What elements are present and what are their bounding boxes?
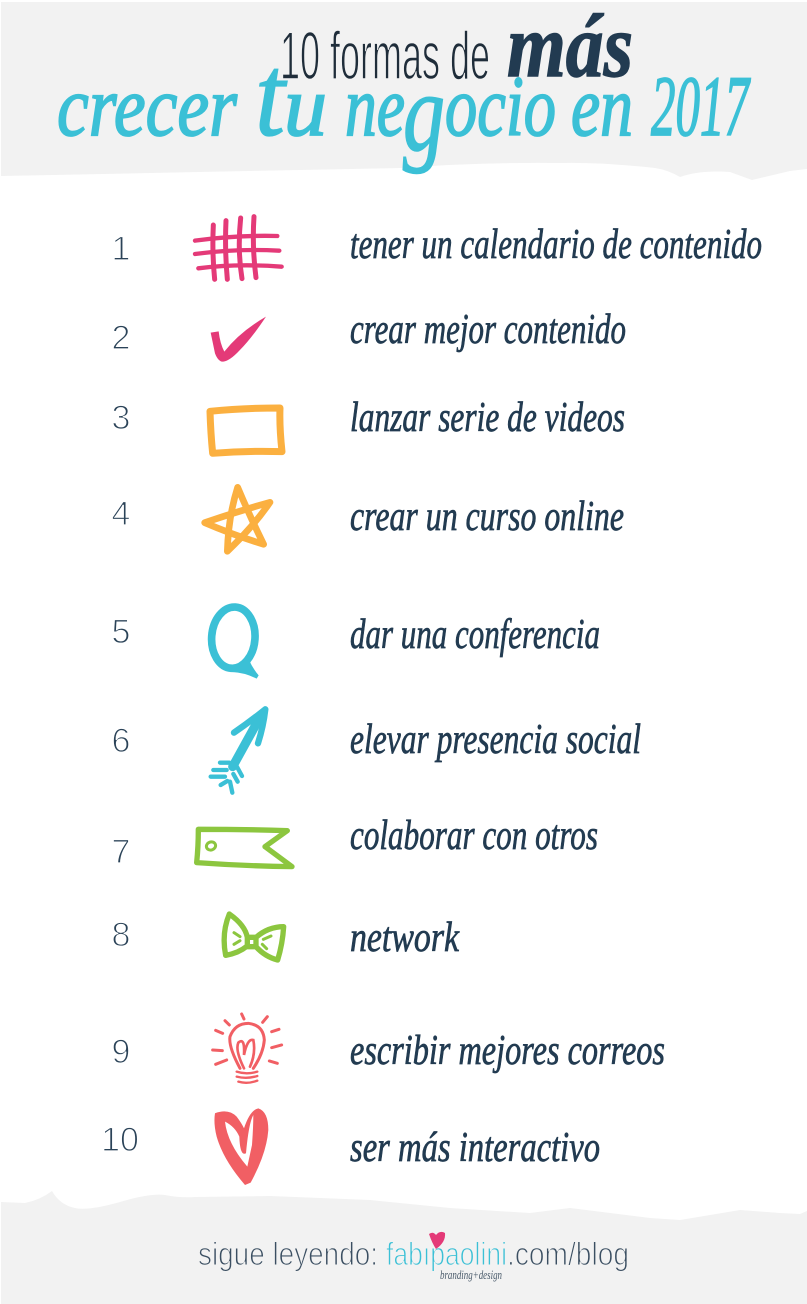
title letters: ocio: ocio <box>445 58 556 154</box>
title <box>57 0 751 175</box>
icon: bow tie <box>224 914 284 960</box>
item 3 text: lanzar serie de videos <box>350 395 625 441</box>
item 3 number: 3 <box>112 399 130 437</box>
title line: 10 formas de: 10 formas de <box>280 18 490 94</box>
item 5 number: 5 <box>112 613 130 651</box>
item 6 number: 6 <box>112 722 130 760</box>
item 7 text: colaborar con otros <box>350 813 598 859</box>
title word: más: más <box>507 0 633 96</box>
item 5 text: dar una conferencia <box>350 612 600 658</box>
footer text: .com/blog: .com/blog <box>507 1236 629 1272</box>
item 9 number: 9 <box>112 1033 130 1071</box>
title word: crecer: crecer <box>57 58 237 154</box>
icon: star <box>205 487 270 551</box>
footer call to action <box>198 1232 629 1282</box>
icon: calendar grid <box>195 217 282 279</box>
item 10 number: 10 <box>101 1121 139 1159</box>
icon: tag <box>197 829 292 867</box>
icon: light bulb <box>213 1014 282 1083</box>
footer logo: fabipaolini: fabıpaolini <box>386 1236 507 1272</box>
item 7 number: 7 <box>112 833 130 871</box>
footer band <box>1 1191 807 1304</box>
icon: arrow <box>211 709 265 793</box>
title letter: u: u <box>284 58 327 154</box>
item 4 text: crear un curso online <box>350 494 624 540</box>
item 2 number: 2 <box>112 319 130 357</box>
icon: heart <box>214 1108 268 1185</box>
title letter: g: g <box>403 50 445 175</box>
logo tagline: branding+design <box>440 1267 502 1282</box>
title letters: ne: ne <box>345 58 405 154</box>
item 8 text: network <box>350 915 460 961</box>
item 6 text: elevar presencia social <box>350 717 641 763</box>
item 2 text: crear mejor contenido <box>350 307 626 353</box>
item 1 number: 1 <box>112 230 130 268</box>
item 9 text: escribir mejores correos <box>350 1028 665 1074</box>
item 8 number: 8 <box>112 916 130 954</box>
icon: rectangle <box>210 408 282 453</box>
item 4 number: 4 <box>112 495 130 533</box>
icon: logo heart <box>429 1232 445 1249</box>
icon: letter Q <box>210 606 259 679</box>
title word: en: en <box>571 58 633 154</box>
footer text: sigue leyendo: sigue leyendo: <box>198 1236 378 1272</box>
item 10 text: ser más interactivo <box>350 1125 600 1171</box>
title letter: t: t <box>255 33 288 161</box>
icon: check mark <box>211 317 266 362</box>
title line: crecer tu negocio en 2017 <box>57 33 751 175</box>
header band <box>1 2 807 180</box>
